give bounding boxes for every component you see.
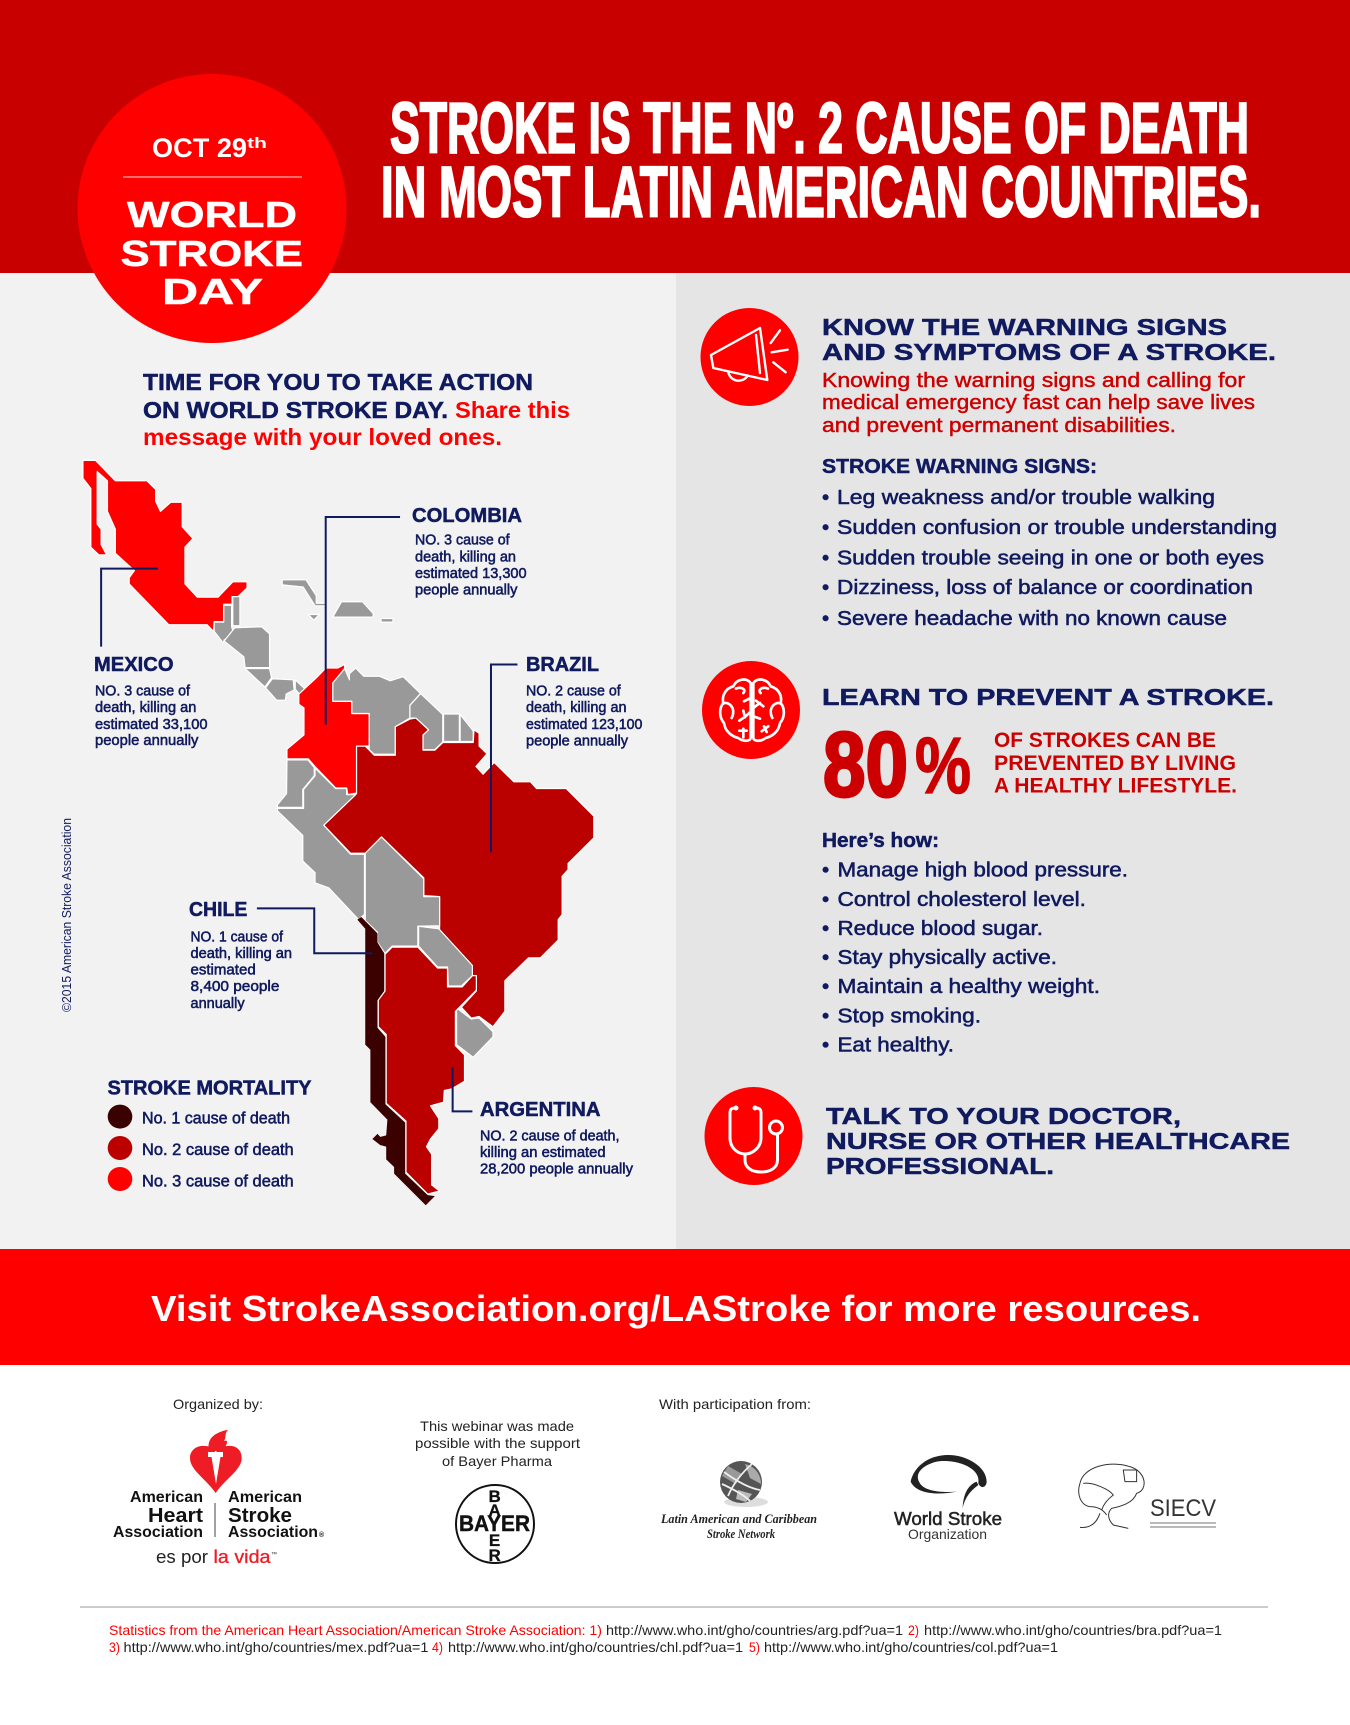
list: stroke warning signs: Sudden confusion or trouble understanding (837, 516, 1277, 539)
list: here's how: Here’s how: (822, 829, 939, 852)
stat: 80 percent: PREVENTED BY LIVING (994, 752, 1236, 775)
call to action heading: ON WORLD STROKE DAY. (143, 397, 448, 423)
legend: stroke mortality (108, 1078, 312, 1191)
right panel background (676, 273, 1350, 1249)
legend: stroke mortality: No. 1 cause of death (142, 1109, 290, 1128)
logo: American Heart Association (113, 1430, 325, 1567)
stat: 80 percent: A HEALTHY LIFESTYLE. (994, 774, 1237, 798)
warning signs intro (822, 369, 1255, 437)
callout: Colombia: estimated 13,300 (415, 565, 527, 582)
list: stroke warning signs: • (822, 576, 829, 599)
callout: Mexico: death, killing an (95, 699, 196, 716)
callout: Argentina: NO. 2 cause of death, (480, 1128, 620, 1144)
list: here's how: • (822, 1005, 829, 1028)
copyright: ©2015 American Stroke Association (60, 818, 74, 1012)
leader lines (101, 517, 517, 1111)
list: here's how (822, 829, 1128, 1056)
list: stroke warning signs: • (822, 486, 829, 509)
list: stroke warning signs: • (822, 607, 829, 630)
heading: warning signs (822, 314, 1276, 365)
callout: Chile (189, 899, 292, 1012)
logo: American Heart Association: American (228, 1489, 302, 1506)
logo: American Heart Association: Association (113, 1524, 203, 1541)
callout: Colombia: COLOMBIA (412, 505, 522, 527)
stat: 80 percent: 80 (823, 714, 908, 816)
list: here's how: • (822, 888, 829, 911)
list: stroke warning signs: Leg weakness and/or trouble walking (837, 486, 1215, 509)
list: here's how: Control cholesterol level. (838, 888, 1086, 911)
callout: Colombia: death, killing an (415, 548, 516, 565)
badge: World Stroke Day (78, 74, 346, 343)
sources: http://www.who.int/gho/countries/arg.pdf?ua=1 (606, 1622, 903, 1638)
callout: Mexico: people annually (95, 732, 199, 749)
logo: Bayer: E (489, 1531, 500, 1550)
list: here's how: Stay physically active. (838, 946, 1057, 969)
callout: Argentina: 28,200 people annually (480, 1161, 633, 1178)
stat: 80 percent (823, 714, 1237, 816)
warning signs intro: and prevent permanent disabilities. (822, 414, 1176, 437)
map: Venezuela and Guianas (333, 668, 473, 754)
logo: World Stroke Organization: World Stroke (894, 1509, 1002, 1529)
map: Mexico (83, 460, 247, 631)
callout: Chile: annually (190, 995, 245, 1012)
list: here's how: Manage high blood pressure. (838, 858, 1128, 882)
heading: talk to your doctor: NURSE OR OTHER HEALTHCARE (826, 1128, 1290, 1154)
warning signs intro: Knowing the warning signs and calling for (822, 369, 1245, 392)
callout: Chile: estimated (190, 962, 256, 979)
callout: Colombia: people annually (415, 582, 518, 599)
map of Latin America (83, 460, 594, 1205)
logo: American Heart Association: la vida (214, 1547, 272, 1567)
callout: Chile: NO. 1 cause of (190, 928, 284, 946)
list: here's how: Stop smoking. (838, 1005, 981, 1028)
stat: 80 percent: % (915, 721, 971, 810)
callout: Chile: 8,400 people (190, 978, 279, 995)
sources: http://www.who.int/gho/countries/chl.pdf?ua=1 (448, 1639, 743, 1655)
banner: visit website: Visit StrokeAssociation.org/LAStroke for more resources. (151, 1288, 1201, 1329)
sources: http://www.who.int/gho/countries/bra.pdf?ua=1 (924, 1622, 1222, 1638)
map: Brazil (324, 718, 594, 1027)
list: stroke warning signs: • (822, 546, 829, 570)
logo: American Heart Association: ™ (271, 1551, 277, 1558)
icon: brain (702, 661, 800, 759)
badge: World Stroke Day: OCT 29 (152, 133, 247, 163)
logo: American Heart Association: American (130, 1489, 203, 1506)
header band (0, 0, 1350, 273)
callout: Mexico (94, 654, 208, 749)
heading: warning signs: KNOW THE WARNING SIGNS (822, 314, 1227, 340)
callout: Brazil: NO. 2 cause of (526, 683, 621, 700)
title (381, 90, 1261, 232)
map: Colombia (287, 664, 369, 795)
logo: Bayer: A (488, 1501, 501, 1520)
logo: SIECV (1079, 1464, 1216, 1528)
sources: 2) (908, 1622, 919, 1638)
heading: talk to your doctor: TALK TO YOUR DOCTOR, (826, 1103, 1181, 1129)
logo: Bayer: B (488, 1487, 501, 1506)
callout: Colombia (412, 505, 527, 599)
logo: American Heart Association: Association (228, 1524, 318, 1541)
footer divider (80, 1606, 1268, 1608)
callout: Chile: death, killing an (190, 945, 292, 962)
logo: Bayer (456, 1485, 534, 1565)
legend: stroke mortality: No. 3 cause of death (142, 1172, 294, 1190)
callout: Brazil: estimated 123,100 (526, 716, 642, 733)
sources: 5) (749, 1639, 760, 1655)
callout: Brazil: death, killing an (526, 699, 627, 716)
icon: stethoscope (704, 1087, 802, 1185)
logo: SIECV: SIECV (1150, 1495, 1216, 1522)
list: stroke warning signs: STROKE WARNING SIGNS: (822, 455, 1097, 478)
warning signs intro: medical emergency fast can help save lives (822, 391, 1255, 414)
stat: 80 percent: OF STROKES CAN BE (994, 729, 1216, 752)
list: stroke warning signs: Dizziness, loss of balance or coordination (837, 576, 1253, 599)
list: here's how: Eat healthy. (838, 1034, 954, 1056)
badge: World Stroke Day: DAY (162, 271, 263, 312)
heading: talk to your doctor: PROFESSIONAL. (826, 1153, 1054, 1179)
logo: Latin American and Caribbean Stroke Network: Stroke Network (707, 1526, 775, 1541)
heading: talk to your doctor (826, 1103, 1290, 1179)
logo: Bayer: BAYER (459, 1511, 530, 1536)
logo: American Heart Association: es por (156, 1547, 208, 1567)
logo: Latin American and Caribbean Stroke Network (660, 1461, 817, 1541)
call to action heading: Share this (455, 397, 570, 423)
list: here's how: Maintain a healthy weight. (838, 975, 1100, 998)
badge: World Stroke Day: STROKE (120, 233, 303, 274)
list: here's how: • (822, 858, 829, 882)
list: stroke warning signs: Sudden trouble seeing in one or both eyes (837, 546, 1264, 570)
legend: stroke mortality: STROKE MORTALITY (108, 1078, 312, 1100)
sources: 3) (109, 1639, 120, 1655)
callout: Argentina: killing an estimated (480, 1144, 606, 1161)
list: stroke warning signs (822, 455, 1277, 630)
callout: Argentina: ARGENTINA (480, 1099, 600, 1121)
badge: World Stroke Day: WORLD (127, 194, 297, 235)
logo: American Heart Association: Heart (148, 1505, 203, 1527)
list: here's how: Reduce blood sugar. (838, 917, 1043, 940)
callout: Argentina (480, 1099, 633, 1178)
list: stroke warning signs: Severe headache with no known cause (837, 607, 1227, 630)
callout: Mexico: estimated 33,100 (95, 716, 208, 733)
logo: World Stroke Organization: Organization (908, 1526, 987, 1542)
heading: prevent a stroke: LEARN TO PREVENT A STROKE. (822, 684, 1274, 710)
list: here's how: • (822, 917, 829, 940)
logo: American Heart Association: ® (319, 1531, 325, 1539)
sources (109, 1622, 1222, 1655)
callout: Brazil: people annually (526, 732, 628, 750)
sources: Statistics from the American Heart Association/American Stroke Association: 1) (109, 1622, 602, 1638)
call to action heading: message with your loved ones. (143, 424, 502, 450)
map: Andean and southern grey countries (277, 760, 493, 1057)
heading: warning signs: AND SYMPTOMS OF A STROKE. (822, 339, 1276, 365)
logo: Bayer: R (488, 1546, 501, 1565)
webinar support note: This webinar was made (420, 1418, 574, 1434)
list: stroke warning signs: • (822, 516, 829, 539)
logo: World Stroke Organization (894, 1455, 1002, 1542)
organized by label: Organized by: (173, 1396, 263, 1412)
icon: megaphone (700, 308, 798, 406)
callout: Mexico: NO. 3 cause of (95, 683, 191, 700)
sources: 4) (432, 1639, 443, 1655)
participation label: With participation from: (659, 1396, 811, 1412)
sources: http://www.who.int/gho/countries/mex.pdf?ua=1 (124, 1639, 429, 1655)
webinar support note: of Bayer Pharma (442, 1453, 552, 1469)
badge: World Stroke Day: th (247, 135, 267, 152)
list: here's how: • (822, 946, 829, 969)
callout: Chile: CHILE (189, 899, 247, 921)
callout: Colombia: NO. 3 cause of (415, 532, 510, 549)
left panel background (0, 273, 676, 1249)
list: here's how: • (822, 975, 829, 998)
legend: stroke mortality: No. 2 cause of death (142, 1140, 294, 1159)
webinar support note: possible with the support (415, 1435, 580, 1451)
call to action heading (143, 369, 570, 450)
map: Chile (357, 917, 435, 1205)
map: Argentina (378, 947, 476, 1194)
map: Central America and Caribbean (214, 580, 393, 700)
callout: Brazil: BRAZIL (526, 654, 599, 676)
sources: http://www.who.int/gho/countries/col.pdf?ua=1 (764, 1639, 1058, 1655)
banner: visit website (0, 1249, 1350, 1365)
callout: Brazil (526, 654, 642, 750)
logo: American Heart Association: Stroke (228, 1505, 292, 1527)
logo: Latin American and Caribbean Stroke Network: Latin American and Caribbean (660, 1511, 817, 1526)
webinar support note (415, 1418, 580, 1469)
callout: Mexico: MEXICO (94, 654, 174, 676)
list: here's how: • (822, 1034, 829, 1056)
call to action heading: TIME FOR YOU TO TAKE ACTION (143, 369, 533, 395)
